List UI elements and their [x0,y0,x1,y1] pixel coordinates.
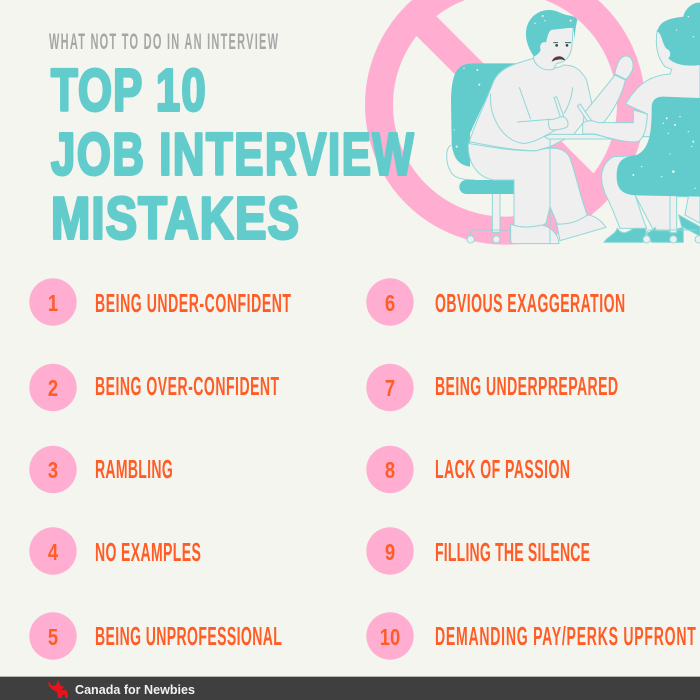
list item 2 [29,364,279,411]
list item 10 [366,612,696,660]
list item 5 [29,612,282,660]
list item 6: OBVIOUS EXAGGERATION [435,290,625,318]
title: MISTAKES [51,187,299,252]
list item 3: 3 [48,458,58,484]
chair: interviewee [447,63,517,243]
list item 5: BEING UNPROFESSIONAL [95,623,282,651]
head [533,27,573,70]
list item 1: 1 [48,291,58,317]
icon: red moose logo [48,680,68,698]
list item 9 [366,527,590,575]
list item 2: 2 [48,376,58,402]
list item 5: 5 [48,625,58,651]
title: TOP 10 [51,57,206,123]
list item 4: NO EXAMPLES [95,539,201,567]
person: interviewer [577,3,700,243]
list item 4 [29,527,201,575]
footer bar [0,676,700,700]
list item 9: 9 [385,540,395,566]
list item 7: BEING UNDERPREPARED [435,373,618,401]
speckles [454,15,696,189]
list item 7: 7 [385,376,395,402]
list item 10: DEMANDING PAY/PERKS UPFRONT [435,623,696,651]
list item 8 [366,446,570,493]
list item 8: 8 [385,458,395,484]
list item 9: FILLING THE SILENCE [435,539,590,567]
list item 4: 4 [48,540,58,566]
person: interviewee [468,10,633,244]
title [51,57,414,252]
title: JOB INTERVIEW [51,121,414,187]
list item 1: BEING UNDER-CONFIDENT [95,290,291,318]
icon: prohibition sign [379,0,631,231]
footer brand name: Canada for Newbies [75,683,195,697]
subtitle: WHAT NOT TO DO IN AN INTERVIEW [49,29,278,54]
list item 7 [366,364,618,411]
list item 1 [29,278,291,326]
list item 10: 10 [380,625,400,651]
list item 3 [29,446,173,493]
list item 8: LACK OF PASSION [435,456,570,484]
list item 3: RAMBLING [95,456,173,484]
list item 6: 6 [385,291,395,317]
illustration: prohibition sign with interview scene [379,0,700,244]
list item 6 [366,278,625,326]
list item 2: BEING OVER-CONFIDENT [95,373,279,401]
